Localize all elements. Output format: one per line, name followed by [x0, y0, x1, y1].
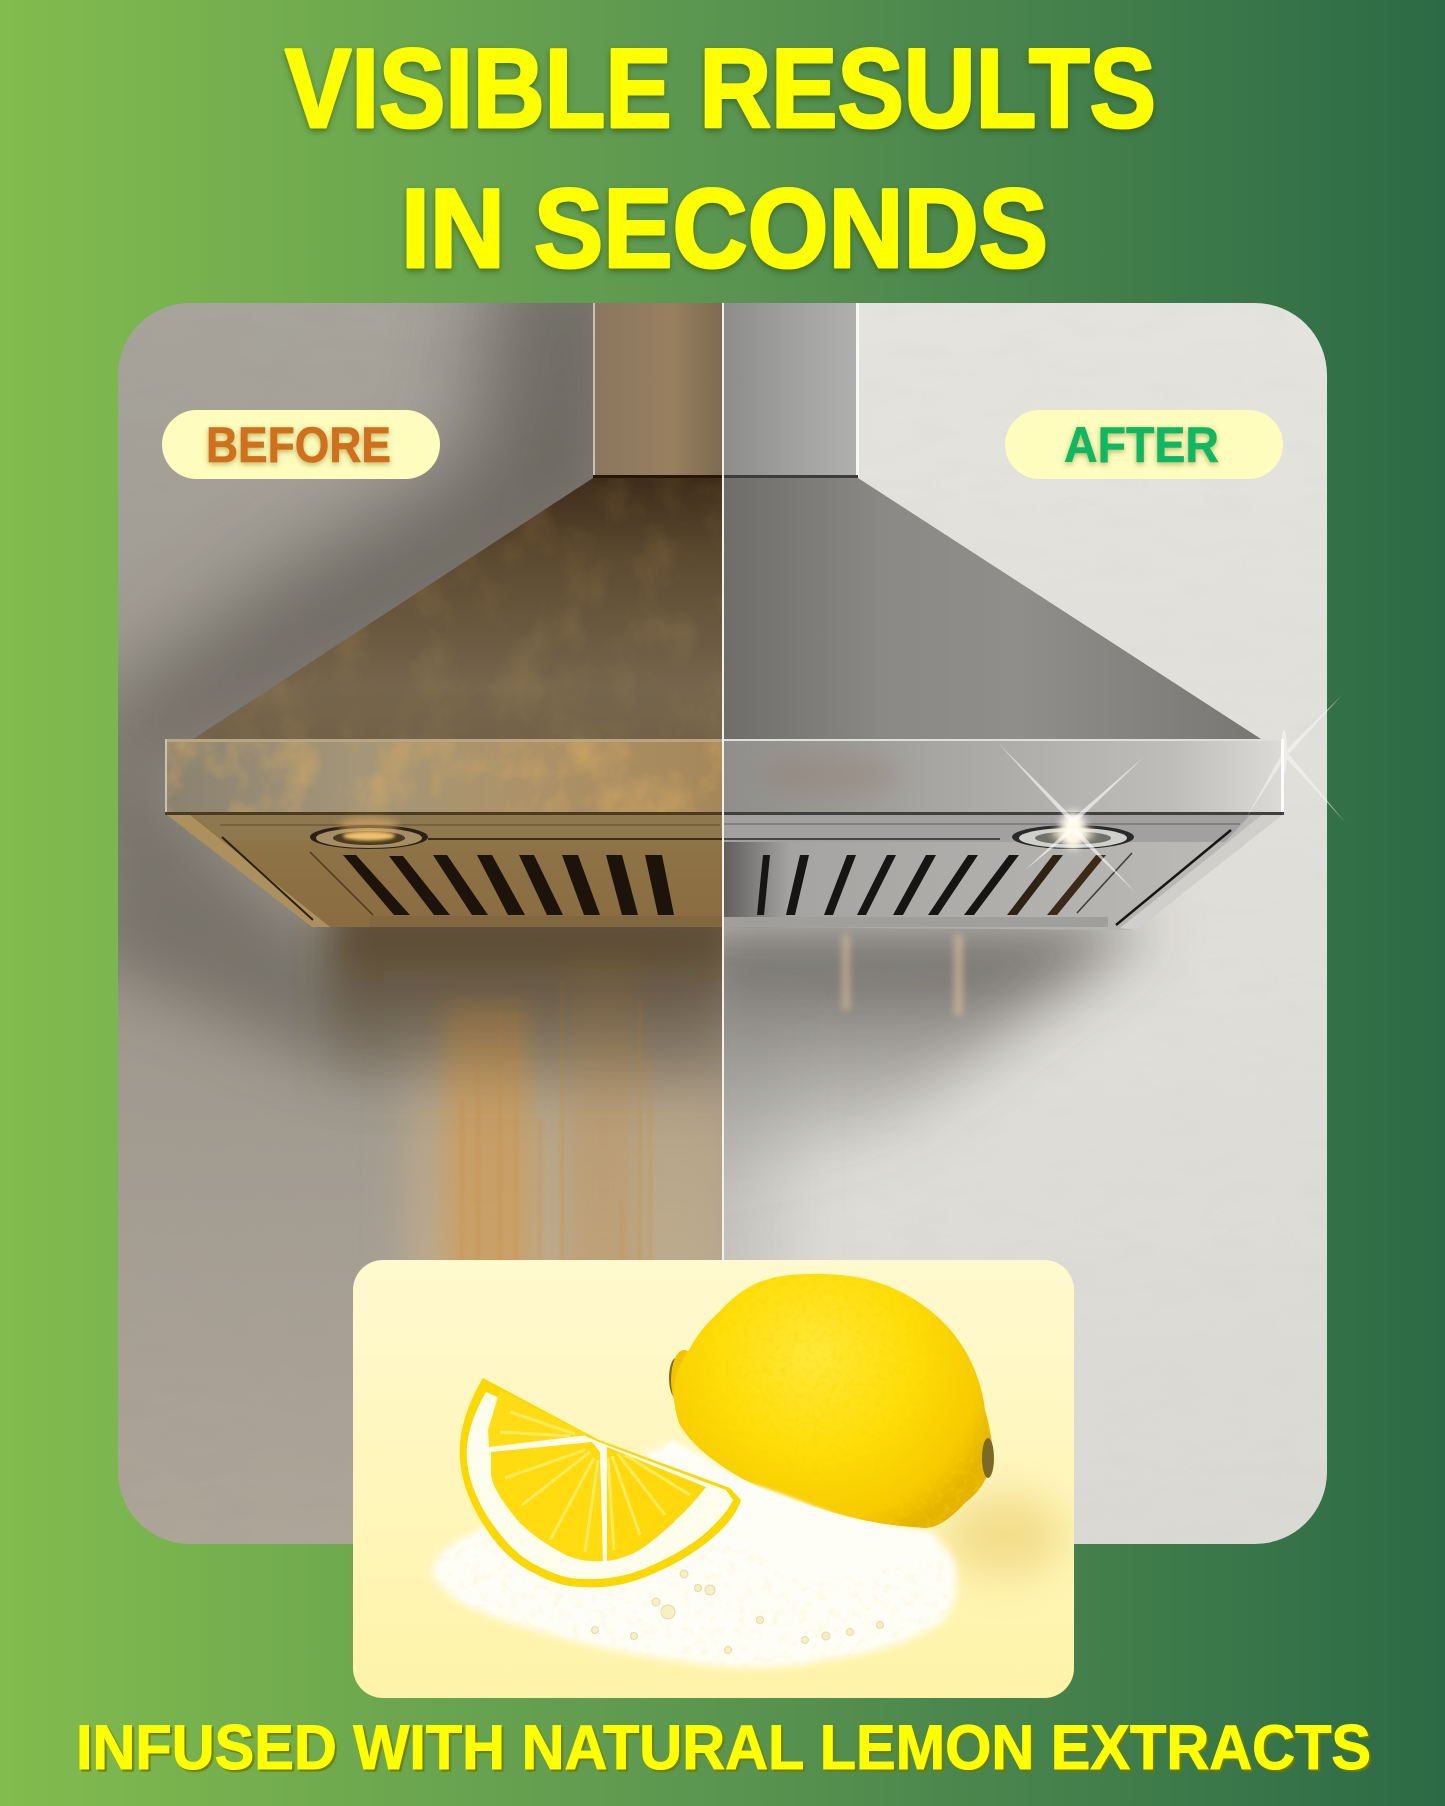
rust streaks on the wall: [305, 922, 722, 1260]
foam: [430, 1440, 960, 1670]
divider line: [722, 303, 724, 1260]
title: VISIBLE RESULTS: [285, 26, 1156, 151]
lemon slice: [460, 1378, 741, 1587]
before side of the comparison: [118, 303, 722, 1544]
rusty hood front band: [165, 739, 723, 815]
dim hood light before: [310, 817, 428, 849]
clean chimney: [723, 303, 858, 477]
after badge: AFTER: [1064, 417, 1219, 473]
wall light reflections: [843, 935, 962, 1015]
foam fringe on lemon base: [640, 1440, 940, 1580]
whole lemon: [669, 1270, 995, 1532]
sparkling hood light after: [998, 743, 1144, 893]
clean hood front band: [723, 739, 1284, 815]
rusty chimney: [593, 303, 723, 477]
clean hood underside and vents: [723, 815, 1282, 930]
lemon card: [353, 1260, 1074, 1698]
corner sparkle: [1245, 695, 1345, 822]
after side of the comparison: [724, 303, 1327, 1544]
clean hood canopy: [723, 478, 1261, 739]
before badge: [162, 410, 440, 479]
footer tagline: INFUSED WITH NATURAL LEMON EXTRACTS: [76, 1713, 1371, 1783]
after badge: [1005, 410, 1283, 479]
rusty hood canopy: [190, 478, 723, 740]
panel: before and after range hood comparison: [118, 303, 1327, 1544]
before badge: BEFORE: [206, 417, 391, 473]
slice flesh segments: [488, 1390, 706, 1561]
lemon shadow on the surface: [945, 1493, 1065, 1577]
title: IN SECONDS: [401, 166, 1048, 291]
title: [285, 26, 1156, 291]
rusty hood underside and vents: [167, 815, 723, 927]
